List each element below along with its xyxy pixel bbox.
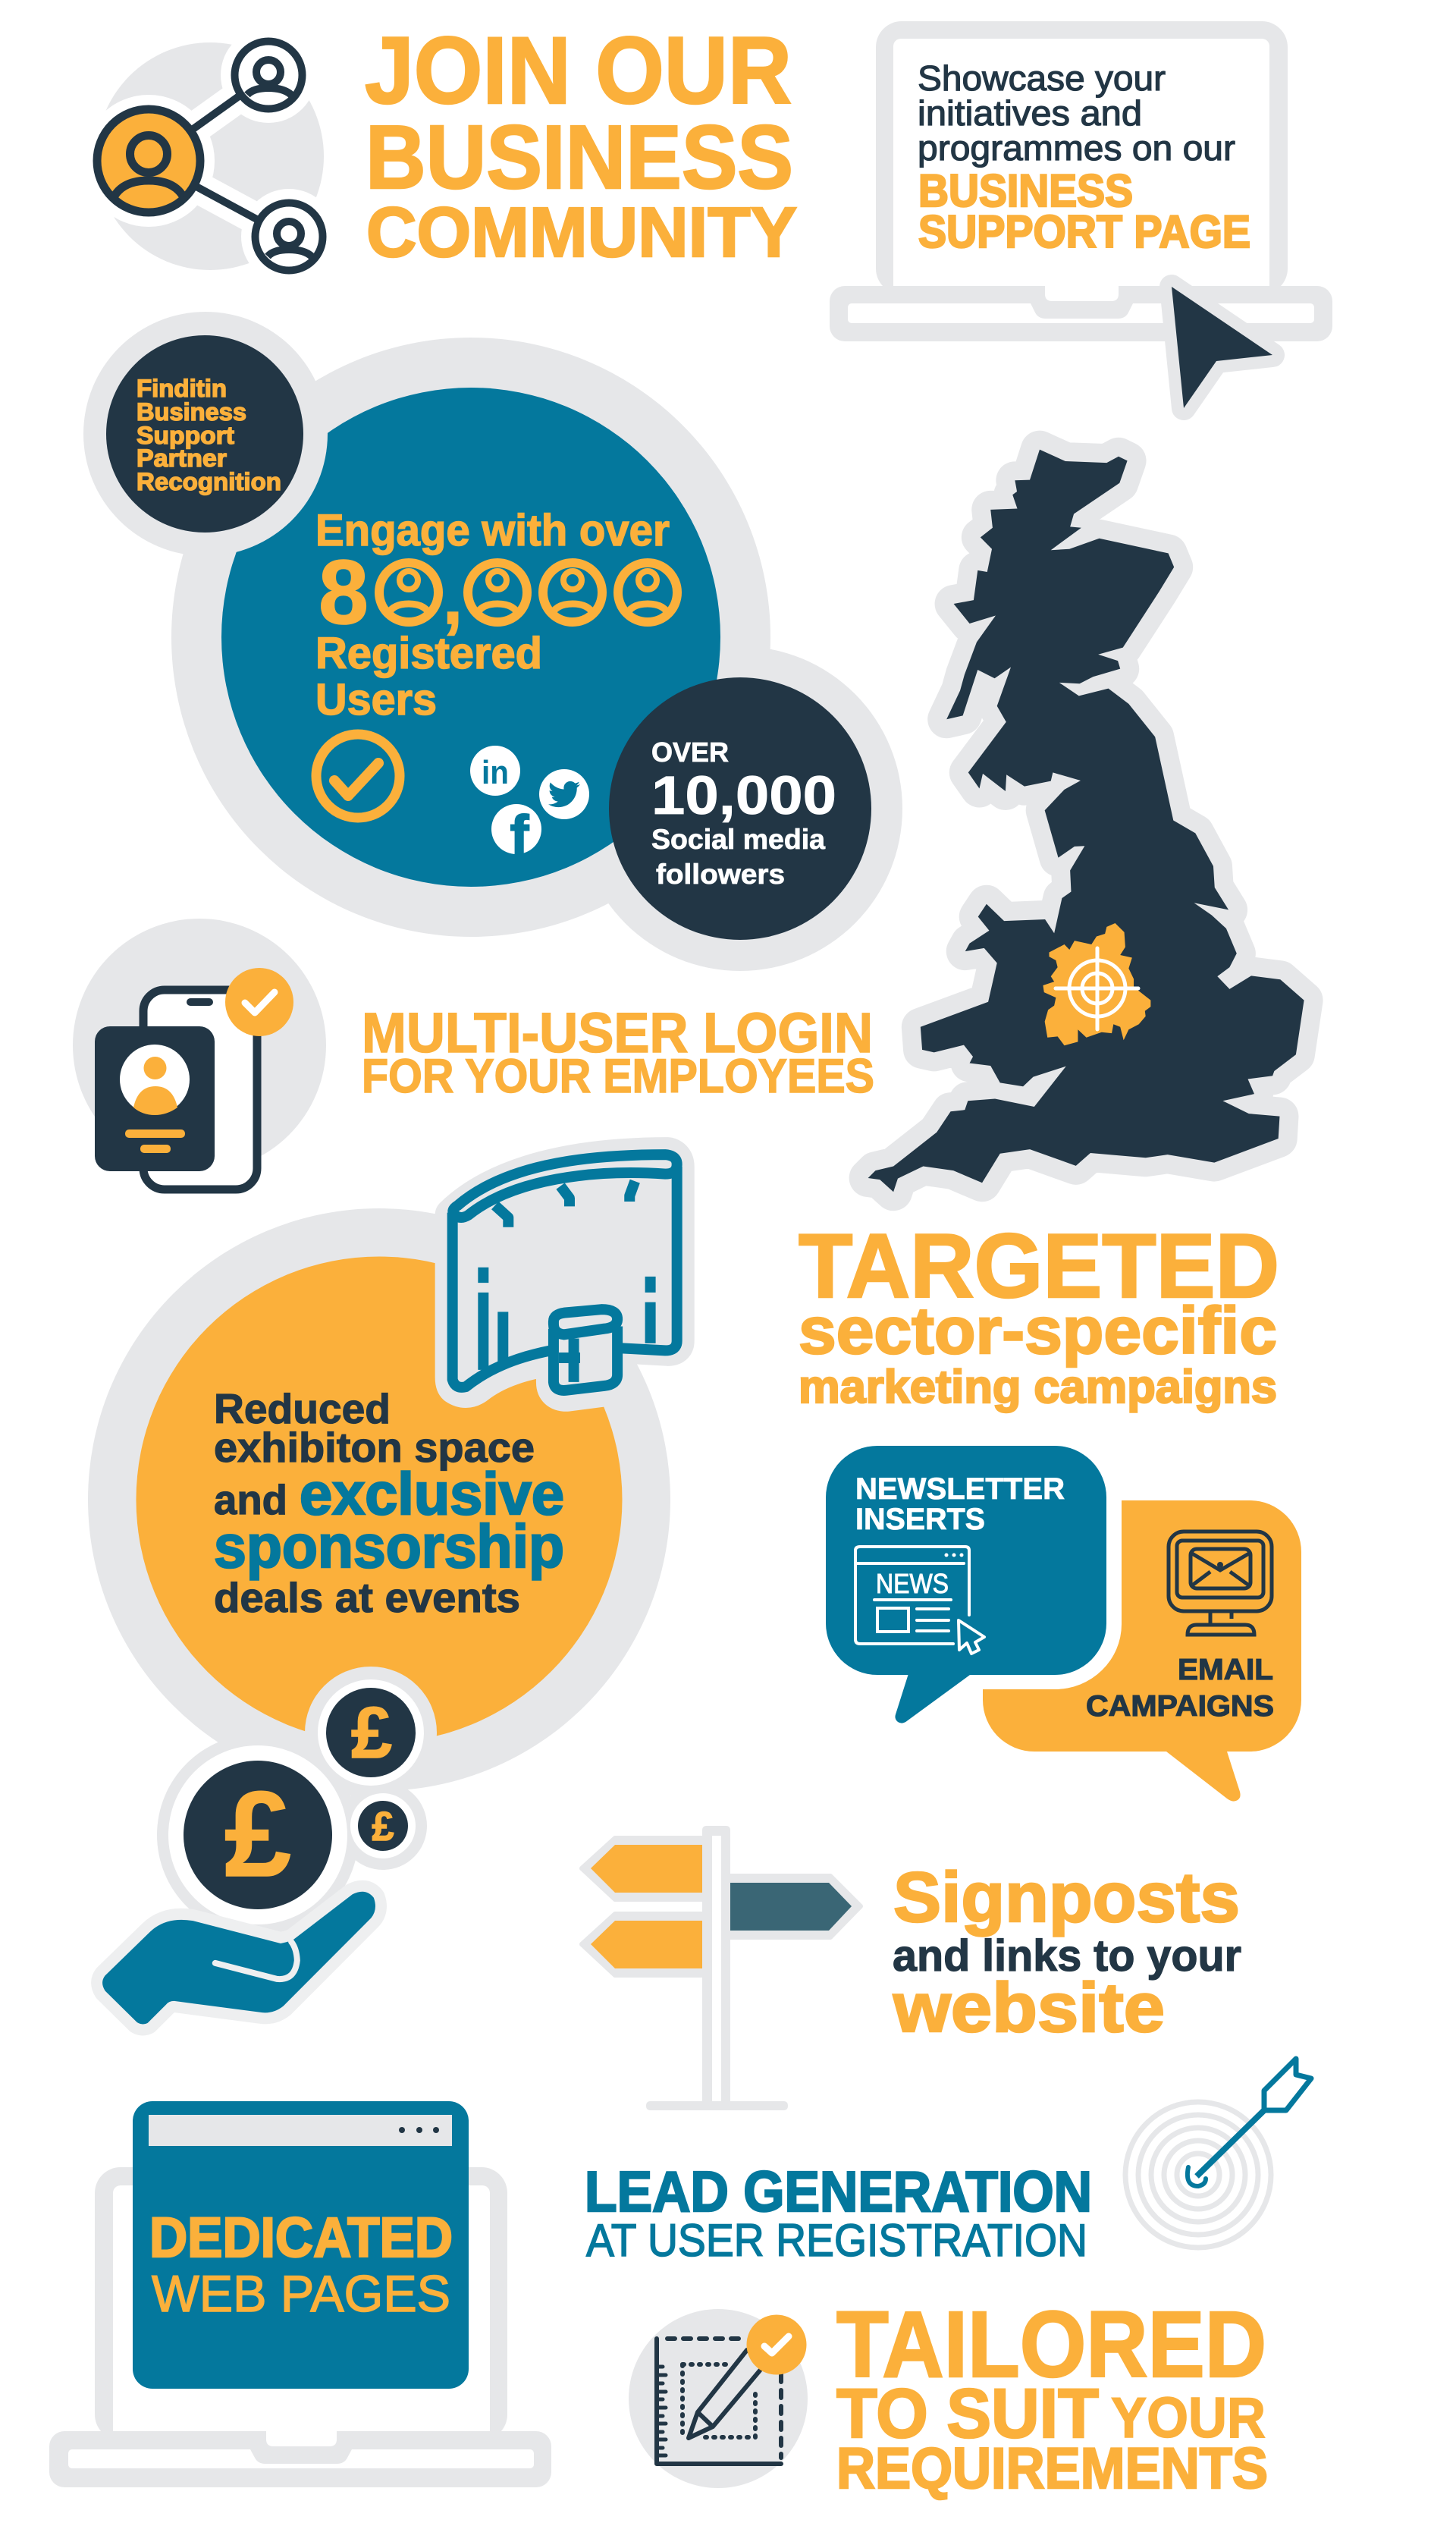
text: showcase: Showcase your [918,58,1166,98]
text: reduced exhibition space: and [214,1476,287,1523]
text: reduced exhibition space [214,1385,564,1621]
badge: partner recognition: Recognition [136,468,281,495]
badge: partner recognition: Partner [136,445,227,472]
icon: hand [102,1892,375,2025]
icon: email monitor [1169,1532,1272,1635]
stat: 80,000 people: 8 [318,542,369,643]
title: join our business community: JOIN OUR [365,18,792,124]
text: tailored to suit your requirements: YOUR [1111,2386,1266,2449]
text: signposts [893,1858,1241,2047]
panel: multi-user login icon [73,919,326,1189]
icon: linkedin [470,746,520,796]
icon: coins and hand: £ [351,1692,392,1774]
text: multi-user login: MULTI-USER LOGIN [362,1001,873,1064]
text: lead generation: AT USER REGISTRATION [586,2215,1087,2266]
text: showcase: programmes on our [918,128,1235,168]
badge: social media followers [609,677,871,940]
text: lead generation [585,2160,1092,2266]
panel: targeted text: sector-specific [799,1294,1277,1368]
callout: newsletter inserts [826,1446,1106,1723]
text: multi-user login: FOR YOUR EMPLOYEES [362,1050,874,1103]
icon: coins and hand: £ [372,1804,394,1849]
badge: social media followers: 10,000 [651,766,836,826]
text: tailored to suit your requirements [836,2293,1268,2501]
text: signposts: Signposts [893,1858,1240,1937]
icon: target with arrow [1125,2059,1311,2248]
icon: facebook: f [510,804,529,867]
panel: targeted text [799,1215,1279,1412]
panel: engage circle group [83,312,902,971]
icon: coins and hand: £ [224,1766,291,1902]
badge: social media followers: Social media [651,824,825,855]
badge: partner recognition: Support [136,422,234,449]
title: join our business community [365,18,797,272]
callout: newsletter inserts: NEWSLETTER [855,1472,1065,1506]
text: engage with over: Engage with over [315,506,670,555]
badge: partner recognition: Finditin [136,375,227,402]
callout: email campaigns: EMAIL [1178,1654,1273,1686]
title: join our business community: BUSINESS [366,107,793,208]
text: signposts: website [893,1969,1165,2047]
icon: news window [855,1547,984,1654]
badge: social media followers: followers [656,859,785,890]
map: united kingdom [868,450,1304,1192]
callout: email campaigns [983,1500,1301,1802]
panel: dedicated web pages laptop: WEB PAGES [152,2265,450,2323]
icon: exhibition stand [453,1155,677,1394]
text: registered users: Users [315,675,437,724]
icon: community network [83,27,337,284]
callout: email campaigns: CAMPAIGNS [1086,1690,1274,1723]
callout: newsletter inserts: INSERTS [855,1503,985,1536]
text: signposts: and links to your [893,1931,1241,1981]
text: showcase [918,58,1250,257]
text: showcase: initiatives and [918,93,1142,133]
icon: coins and hand [102,1667,437,2025]
stat: 80,000 people: , [443,555,463,640]
icon: twitter [539,769,589,819]
text: reduced exhibition space: exclusive [300,1460,564,1527]
text: tailored to suit your requirements: TAILORED [836,2293,1266,2397]
panel: exhibition and sponsorship [88,1155,677,1791]
text: showcase: BUSINESS [918,165,1133,216]
badge: partner recognition [106,335,303,533]
text: reduced exhibition space: sponsorship [214,1513,564,1580]
icon: check circle [316,734,400,818]
text: lead generation: LEAD GENERATION [585,2160,1092,2223]
text: reduced exhibition space: deals at events [214,1574,520,1621]
icon: signpost [582,1826,861,2110]
text: showcase: SUPPORT PAGE [918,206,1250,257]
panel: dedicated web pages laptop: DEDICATED [149,2206,453,2269]
title: join our business community: COMMUNITY [366,193,797,272]
icon: design edit [629,2309,808,2488]
panel: laptop business support page [830,21,1332,341]
icon: news window: NEWS [876,1568,949,1599]
panel: targeted text: TARGETED [799,1215,1279,1317]
text: tailored to suit your requirements: REQUIREMENTS [836,2436,1268,2501]
icon: linkedin: in [482,754,509,791]
text: multi-user login [362,1001,874,1103]
panel: targeted text: marketing campaigns [799,1361,1277,1412]
text: registered users [315,629,542,724]
icon: facebook [491,804,541,867]
badge: partner recognition: Business [136,398,246,426]
text: registered users: Registered [315,629,542,678]
badge: social media followers: OVER [651,737,729,768]
panel: dedicated web pages laptop [49,2101,551,2487]
icon: cursor arrow [1172,287,1272,408]
stat: 80,000 people [318,542,677,643]
icon: target reticle [1056,948,1138,1029]
text: tailored to suit your requirements: TO SUIT [836,2375,1099,2452]
text: reduced exhibition space: exhibiton space [214,1424,535,1471]
text: reduced exhibition space: Reduced [214,1385,391,1432]
